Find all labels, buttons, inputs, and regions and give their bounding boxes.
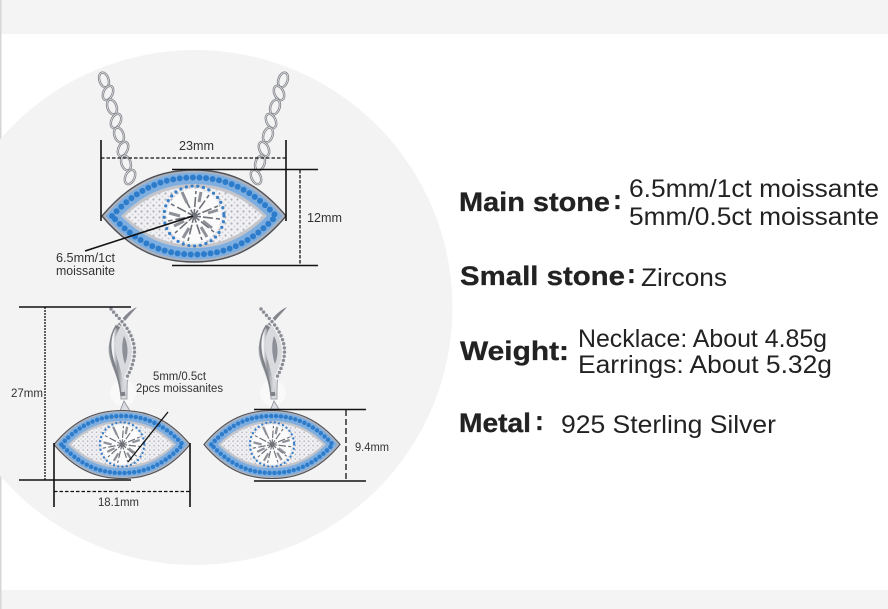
spec: small stone: : (627, 259, 636, 289)
spec: main stone: 6.5mm/1ct moissante (629, 176, 879, 203)
top band (0, 0, 888, 34)
necklace dimensions (56, 139, 342, 278)
height dimension 12mm (172, 170, 342, 266)
callout: necklace main stone: 6.5mm/1ct (56, 251, 116, 265)
bottom band (0, 590, 888, 609)
callout: earring main stone (128, 371, 223, 462)
callout: necklace main stone (56, 216, 193, 278)
spec: small stone: Small stone (460, 261, 625, 291)
height dimension 12mm: 12mm (307, 211, 342, 225)
spec: main stone: 5mm/0.5ct moissante (629, 204, 879, 231)
spec: metal (459, 406, 776, 439)
height dimension 9.4mm: 9.4mm (355, 442, 389, 454)
icon: right earring (204, 307, 340, 479)
spec: main stone: : (613, 185, 622, 215)
icon: left chain (97, 71, 137, 186)
callout: earring main stone: 2pcs moissanites (136, 383, 223, 395)
callout: necklace main stone: moissanite (56, 264, 115, 278)
icon: left earring (54, 307, 190, 479)
spec: weight: Earrings: About 5.32g (578, 352, 832, 379)
callout: earring main stone: 5mm/0.5ct (153, 371, 207, 383)
necklace pendant with chain (97, 71, 290, 262)
length dimension 27mm: 27mm (11, 388, 43, 400)
width dimension 23mm (101, 139, 286, 221)
spec: weight: Weight: (460, 336, 569, 366)
spec: metal: 925 Sterling Silver (561, 412, 776, 439)
spec: metal: : (535, 406, 544, 436)
spec: weight (460, 326, 832, 379)
height dimension 9.4mm (254, 410, 389, 481)
spec: small stone: Zircons (641, 265, 727, 292)
width dimension 18.1mm (54, 443, 190, 509)
spec: main stone: Main stone (459, 187, 610, 217)
icon: eye pendant (102, 170, 286, 262)
earring dimensions (11, 307, 389, 509)
spec: weight: Necklace: About 4.85g (578, 326, 827, 353)
left edge line (0, 0, 2, 609)
spec: metal: Metal (459, 408, 531, 438)
width dimension 18.1mm: 18.1mm (98, 497, 139, 509)
width dimension 23mm: 23mm (179, 139, 214, 153)
spec: small stone (460, 259, 727, 292)
icon: right chain (249, 71, 290, 186)
length dimension 27mm (11, 307, 131, 480)
background circle (0, 50, 452, 565)
spec: main stone (459, 176, 879, 231)
